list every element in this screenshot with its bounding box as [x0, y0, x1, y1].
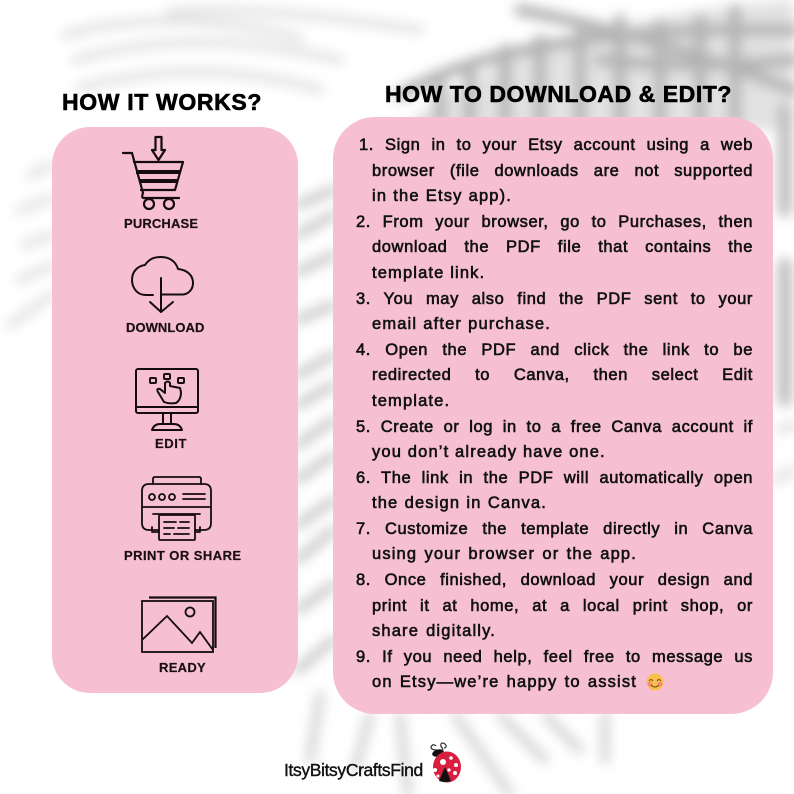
instructions list: 2. From your browser, go to Purchases, then	[356, 213, 753, 231]
instructions list: template.	[372, 392, 450, 410]
label: edit: EDIT	[155, 436, 187, 451]
instructions list: print it at home, at a local print shop, or	[372, 597, 753, 615]
instructions list: 6. The link in the PDF will automatically open	[356, 469, 753, 487]
instructions list: the design in Canva.	[372, 494, 547, 512]
label: print or share: PRINT OR SHARE	[124, 548, 242, 563]
instructions list: 7. Customize the template directly in Canva	[356, 520, 753, 538]
instructions list: 5. Create or log in to a free Canva account if	[356, 418, 753, 436]
panel: how to download and edit	[333, 117, 773, 714]
instructions list: 8. Once finished, download your design and	[356, 571, 753, 589]
instructions list: 1. Sign in to your Etsy account using a web	[359, 136, 753, 154]
instructions list: redirected to Canva, then select Edit	[372, 366, 753, 384]
instructions list: template link.	[372, 264, 485, 282]
instructions list: email after purchase.	[372, 315, 551, 333]
label: ready: READY	[159, 660, 206, 675]
instructions list: using your browser or the app.	[372, 545, 637, 563]
instructions list: in the Etsy app).	[372, 187, 512, 205]
instructions list: 4. Open the PDF and click the link to be	[356, 341, 753, 359]
heading: how it works: HOW IT WORKS?	[62, 89, 262, 115]
instructions list: download the PDF file that contains the	[372, 238, 753, 256]
label: purchase: PURCHASE	[124, 216, 198, 231]
logo text: ItsyBitsyCraftsFind	[284, 760, 423, 780]
heading: how to download and edit: HOW TO DOWNLOAD & EDIT?	[385, 81, 732, 107]
instructions list: on Etsy—we’re happy to assist	[372, 673, 637, 691]
label: download: DOWNLOAD	[126, 320, 204, 335]
instructions list: share digitally.	[372, 622, 496, 640]
instructions list: 9. If you need help, feel free to message us	[356, 648, 753, 666]
instructions list: 3. You may also find the PDF sent to your	[356, 290, 753, 308]
panel: how it works	[52, 127, 298, 693]
instructions list: browser (file downloads are not supported	[372, 162, 753, 180]
instructions list: you don’t already have one.	[372, 443, 606, 461]
